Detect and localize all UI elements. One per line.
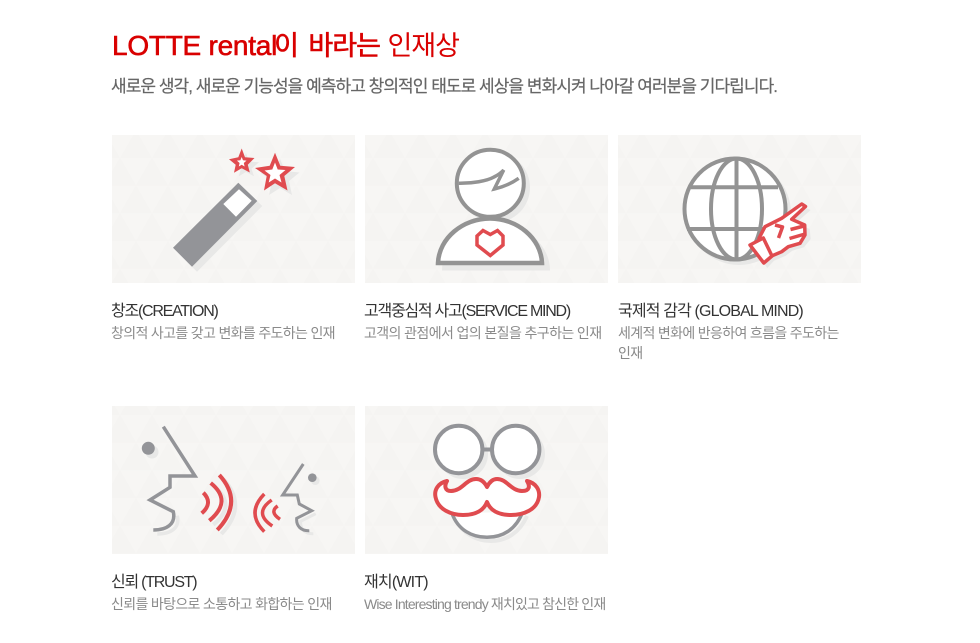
icon: glasses (435, 426, 545, 479)
description (618, 325, 839, 361)
icon: sound waves left (255, 494, 280, 532)
card text: service (364, 302, 602, 341)
description: 인재 (618, 345, 642, 361)
panel: global (618, 135, 861, 283)
icon: sound waves right (202, 475, 235, 534)
description: 세계적 변화에 반응하여 흐름을 주도하는 (618, 325, 839, 341)
icon: large star (255, 153, 300, 195)
card text: global (618, 302, 839, 361)
heading: 신뢰 (TRUST) (111, 574, 196, 591)
subtitle: 새로운 생각, 새로운 기능성을 예측하고 창의적인 태도로 세상을 변화시켜 나아갈 여러분을 기다립니다. (111, 77, 777, 96)
panel: trust (112, 406, 355, 554)
description: 고객의 관점에서 업의 본질을 추구하는 인재 (364, 325, 602, 341)
icon: globe (684, 158, 791, 265)
heading: 재치(WIT) (364, 574, 428, 591)
icon: person (438, 150, 550, 270)
description: Wise Interesting trendy 재치있고 참신한 인재 (364, 596, 605, 612)
card text: wit (364, 574, 605, 612)
title: LOTTE rental이 바라는 인재상 (112, 30, 459, 61)
card text: creation (111, 302, 335, 341)
heading: 창조(CREATION) (111, 303, 218, 320)
description: 신뢰를 바탕으로 소통하고 화합하는 인재 (111, 596, 332, 612)
icon: large face (142, 427, 195, 534)
heading: 국제적 감각 (GLOBAL MIND) (618, 303, 803, 320)
icon: pointing hand (750, 204, 811, 268)
heading: 고객중심적 사고(SERVICE MIND) (364, 303, 570, 320)
panel: wit (365, 406, 608, 554)
description: 창의적 사고를 갖고 변화를 주도하는 인재 (111, 325, 335, 341)
icon: mustache (435, 479, 539, 515)
icon: magic wand (173, 183, 262, 272)
icon: chin (452, 512, 527, 541)
panel: creation (112, 135, 355, 283)
icon: small face (283, 464, 320, 534)
card text: trust (111, 574, 332, 612)
panel: service (365, 135, 608, 283)
icon: small star (229, 148, 259, 176)
